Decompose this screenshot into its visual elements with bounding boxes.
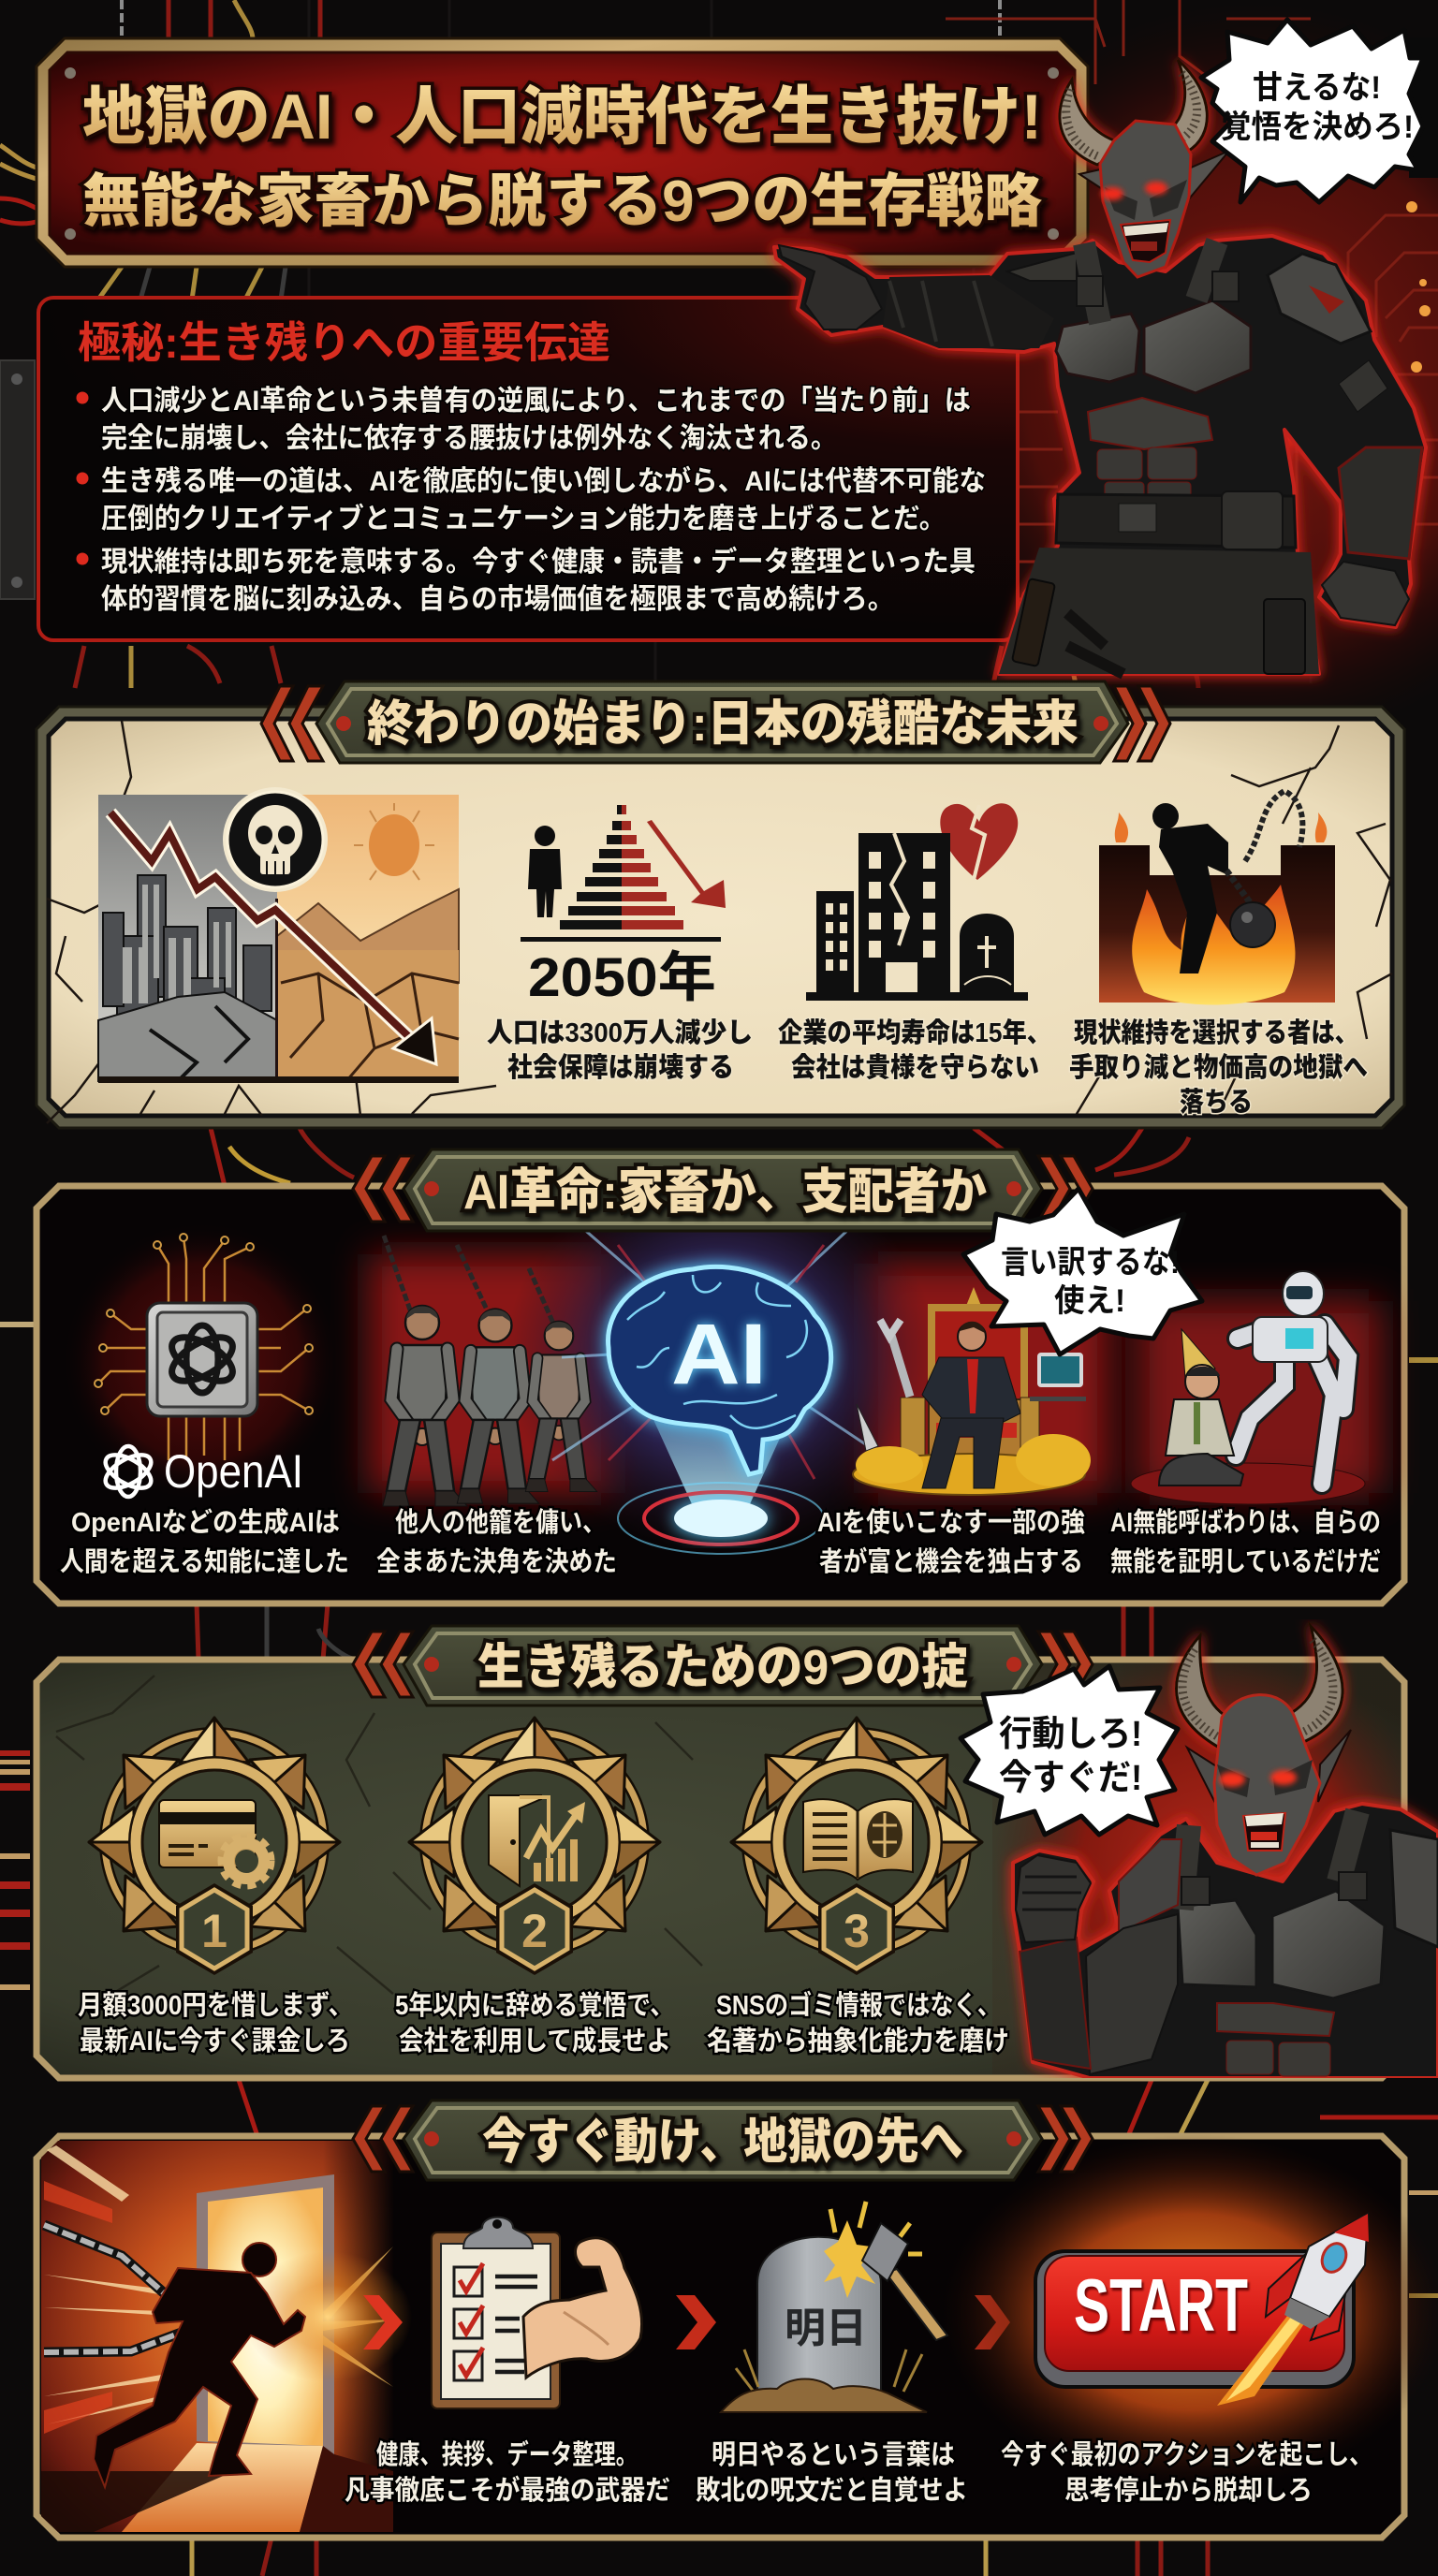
header plaque (37, 38, 1088, 267)
captions: rules: SNSのゴミ情報ではなく、 (716, 1989, 1001, 2021)
illustration: chained people (383, 1236, 597, 1506)
caption: status quo: 現状維持を選択する者は、 (1074, 1017, 1358, 1048)
captions: rules: 最新AIに今すぐ課金しろ (80, 2026, 350, 2056)
icon: man in hell chained (1099, 791, 1335, 1005)
badge 1: card (89, 1718, 340, 1975)
panel: 9つの掟 (37, 1660, 1404, 2078)
caption: status quo: 手取り減と物価高の地獄へ (1069, 1052, 1368, 1083)
illustration: man on throne (853, 1287, 1091, 1495)
captions: act now: 明日やるという言葉は (712, 2439, 955, 2470)
arrow 3 (975, 2295, 1010, 2349)
section heading: 今すぐ動け (353, 2100, 1093, 2180)
icon: skull (223, 787, 328, 892)
chart: collapse city and desert (98, 787, 459, 1083)
demon armor 2 (1016, 1811, 1438, 2076)
demon head 2 (1187, 1695, 1351, 1875)
illustration: glowing AI brain: AI (671, 1307, 767, 1402)
captions: act now: 健康、挨拶、データ整理。 (376, 2438, 638, 2470)
illustration: robot and kneeling man (1131, 1271, 1365, 1504)
captions: rules: 5年以内に辞める覚悟で、 (395, 1990, 674, 2021)
red circuit backdrop behind demon (899, 0, 1438, 749)
illustration: escaping runner (41, 2141, 412, 2532)
captions: AI revolution: 他人の他籠を傭い、 (395, 1507, 606, 1538)
captions: act now (345, 2438, 1372, 2506)
parchment cracks (47, 721, 1392, 1123)
section heading: 今すぐ動け: 今すぐ動け、地獄の先へ (482, 2115, 963, 2170)
icon: broken company (806, 803, 1028, 1001)
title: 無能な家畜から脱する9つの生存戦略 (82, 169, 1042, 234)
speech bubble: 行動しろ: 行動しろ! (999, 1715, 1142, 1754)
captions: AI revolution (60, 1507, 1381, 1577)
captions: act now: 思考停止から脱却しろ (1064, 2475, 1313, 2506)
section heading: 生き残るための9つの掟 (353, 1626, 1093, 1705)
demon head (1079, 121, 1229, 277)
caption: company: 企業の平均寿命は15年、 (778, 1017, 1051, 1048)
panel: 今すぐ動け (37, 2134, 1438, 2538)
caption: population (487, 1017, 753, 1083)
section heading: 終わりの始まり: 終わりの始まり:日本の残酷な未来 (367, 697, 1078, 752)
captions: AI revolution: 全まあた決角を決めた (376, 1546, 617, 1577)
speech bubble: 行動しろ: 今すぐだ! (999, 1759, 1142, 1798)
badge 1: card: 1 (201, 1905, 227, 1957)
caption: population: 人口は3300万人減少し (487, 1017, 753, 1048)
caption: status quo: 落ちる (1180, 1087, 1253, 1118)
caption: company (778, 1017, 1051, 1083)
bullet list: 生き残る唯一の道は、AIを徹底的に使い倒しながら、AIには代替不可能な (101, 465, 986, 497)
captions: AI revolution: 無能を証明しているだけだ (1110, 1546, 1381, 1577)
badge 2: door and growth (409, 1718, 660, 1975)
captions: AI revolution: AI無能呼ばわりは、自らの (1110, 1507, 1381, 1538)
bullet list: 現状維持は即ち死を意味する。今すぐ健康・読書・データ整理といった具 (101, 546, 976, 578)
badge 2: door and growth: 2 (521, 1905, 548, 1957)
demon: fist raised (1013, 1626, 1438, 2078)
heading: secret: 極秘:生き残りへの重要伝達 (78, 318, 610, 367)
captions: rules (78, 1989, 1009, 2056)
scene backgrounds (62, 1161, 1381, 1554)
speech bubble: 言い訳するな (963, 1189, 1202, 1354)
bullet list (77, 386, 986, 615)
side fixtures (0, 360, 1438, 2298)
bullet list: 人口減少とAI革命という未曽有の逆風により、これまでの「当たり前」は (101, 386, 971, 417)
logo: OpenAI (100, 1445, 303, 1498)
captions: rules: 名著から抽象化能力を磨け (707, 2026, 1009, 2056)
speech bubble: 甘えるな (1201, 20, 1438, 202)
arrow 2 (676, 2295, 716, 2349)
runner silhouette (94, 2243, 305, 2487)
speech bubble: 行動しろ (961, 1666, 1178, 1835)
icon: START button and rocket (942, 2134, 1438, 2490)
demon armor (779, 242, 1422, 674)
panel: 終わりの始まり (37, 707, 1404, 1128)
caption: status quo (1069, 1017, 1368, 1118)
section heading: 終わりの始まり (261, 681, 1170, 763)
icon: AI chip (95, 1234, 313, 1460)
hanging chains (122, 0, 1000, 39)
badge 3: book and brain (731, 1718, 982, 1975)
year label: 2050年 (528, 947, 716, 1008)
icon: START button and rocket: START (1074, 2263, 1248, 2347)
captions: rules: 月額3000円を惜しまず、 (78, 1990, 353, 2021)
section heading: AI革命 (353, 1149, 1093, 1231)
badge 3: book and brain: 3 (844, 1905, 870, 1957)
icon: tombstone smashed (721, 2202, 947, 2412)
captions: AI revolution: 者が富と機会を独占する (819, 1545, 1083, 1577)
chart: population pyramid (521, 805, 726, 1008)
title (82, 81, 1042, 234)
captions: act now: 敗北の呪文だと自覚せよ (696, 2475, 968, 2506)
bullet list: 圧倒的クリエイティブとコミュニケーション能力を磨き上げることだ。 (101, 503, 946, 534)
section heading: AI革命: AI革命:家畜か、支配者か (463, 1165, 987, 1220)
captions: act now: 今すぐ最初のアクションを起こし、 (1001, 2439, 1372, 2470)
speech bubble: 言い訳するな: 言い訳するな! (1001, 1245, 1180, 1281)
captions: act now: 凡事徹底こそが最強の武器だ (345, 2474, 670, 2506)
caption: company: 会社は貴様を守らない (791, 1052, 1039, 1083)
captions: AI revolution: 人間を超える知能に達した (60, 1546, 349, 1577)
title: 地獄のAI・人口減時代を生き抜け! (82, 81, 1042, 153)
demon: pointing (774, 60, 1426, 674)
icon: checklist and muscle (432, 2217, 642, 2408)
captions: AI revolution: AIを使いこなす一部の強 (817, 1507, 1085, 1538)
speech bubble: 甘えるな: 甘えるな! (1253, 70, 1381, 106)
panel: secret briefing (38, 298, 1018, 640)
icon: tombstone smashed: 明日 (785, 2305, 867, 2351)
chain (44, 2225, 199, 2352)
captions: AI revolution: OpenAIなどの生成AIは (71, 1507, 340, 1538)
bullet list: 体的習慣を脳に刻み込み、自らの市場価値を極限まで高め続けろ。 (101, 584, 894, 615)
speech bubble: 甘えるな: 覚悟を決めろ! (1221, 110, 1414, 145)
bullet list: 完全に崩壊し、会社に依存する腰抜けは例外なく淘汰される。 (101, 423, 837, 454)
panel: AI革命 (37, 1161, 1404, 1603)
arrow 1 (363, 2295, 403, 2349)
section heading: 生き残るための9つの掟: 生き残るための9つの掟 (477, 1641, 968, 1695)
speech bubble: 言い訳するな: 使え! (1054, 1283, 1125, 1319)
illustration: glowing AI brain (552, 1226, 889, 1554)
horn banding (1066, 73, 1197, 157)
caption: population: 社会保障は崩壊する (507, 1052, 734, 1083)
logo: OpenAI: OpenAI (164, 1445, 303, 1498)
captions: rules: 会社を利用して成長せよ (399, 2026, 671, 2056)
